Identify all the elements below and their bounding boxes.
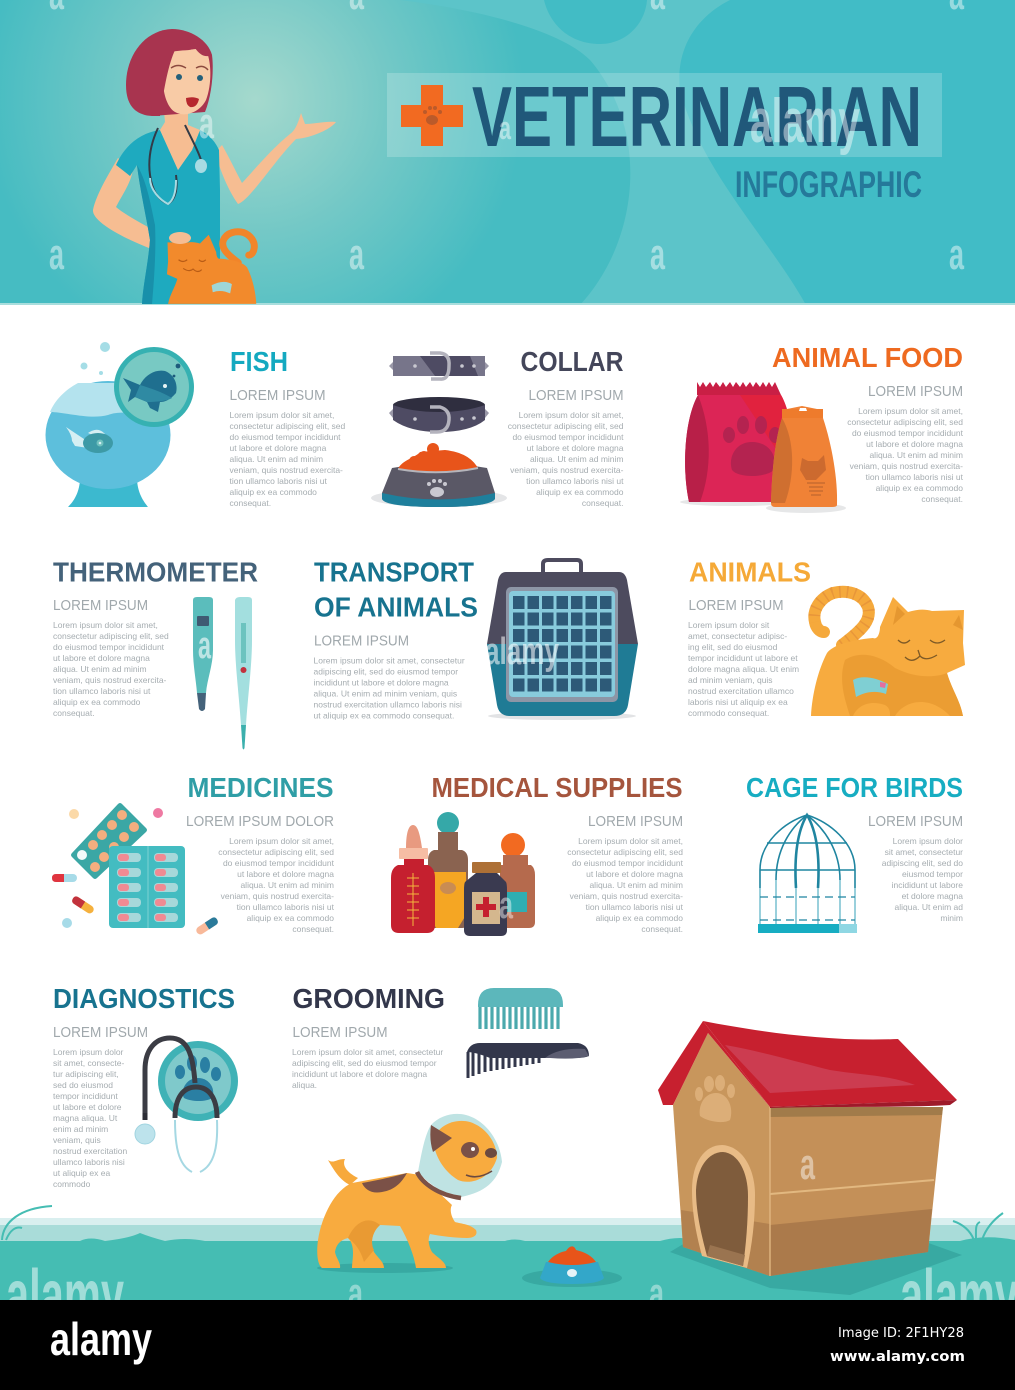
icon: thermometer with scale (235, 597, 252, 750)
body text: consectetur adipiscing elit, sed (847, 417, 963, 427)
watermark: alamy (485, 631, 559, 673)
brown bottle (437, 812, 459, 834)
body text: nostrud exercitation ullamco (688, 686, 794, 696)
body (317, 1173, 477, 1268)
neck (160, 100, 200, 170)
icon: right grass (953, 1213, 1003, 1240)
subheading: LOREM IPSUM (528, 387, 624, 404)
icon: stethoscope with paw (135, 1038, 238, 1172)
heading: diagnostics: DIAGNOSTICS (53, 983, 235, 1014)
icon: food bags (680, 382, 846, 513)
heading: thermometer: THERMOMETER (53, 556, 258, 588)
heading: animal food: ANIMAL FOOD (772, 342, 963, 373)
icon: pet carrier (485, 560, 638, 720)
body text: tion ullamco laboris nisi ut (53, 686, 151, 696)
watermark marks in header: alamy (750, 87, 860, 156)
body text: incididunt ut labore (892, 880, 963, 890)
section: grooming (292, 983, 589, 1090)
body text: dolore magna aliqua. Ut enim (688, 664, 799, 674)
body text: laboris nisi ut aliquip ex ea (688, 697, 788, 707)
illustration: veterinarian woman (93, 29, 336, 304)
icon: teal comb (478, 988, 563, 1029)
body text: consectetur adipiscing elit, sed (567, 847, 683, 857)
body text: veniam, quis nostrud exercita- (230, 465, 343, 475)
icon: flat collar (389, 353, 489, 379)
subheading: LOREM IPSUM DOLOR (186, 813, 334, 830)
bottom watermarks (6, 1256, 1015, 1336)
body text: aliqua. (292, 1080, 317, 1090)
face (163, 48, 210, 114)
body text: consectetur adipiscing elit, sed (218, 847, 334, 857)
body text: adipiscing elit, sed do eiusmod tempor (292, 1058, 437, 1068)
body text: Lorem ipsum dolor sit amet, (230, 410, 334, 420)
icon: small food bowl (522, 1246, 622, 1287)
heading: transport of animals: OF ANIMALS (314, 592, 478, 622)
icon: left grass (2, 1206, 52, 1240)
hair back (126, 29, 213, 116)
roof (658, 1021, 770, 1107)
body text: tur adipiscing elit, (53, 1069, 119, 1079)
body text: veniam, quis nostrud exercita- (510, 465, 624, 475)
watermark marks in header (49, 0, 964, 279)
body text: aliqua. Ut enim ad minim (240, 880, 334, 890)
illustration: dog house (658, 1021, 962, 1295)
body text: aliquip ex ea commodo (876, 483, 963, 493)
section: medical supplies (391, 772, 684, 936)
heading: medicines: MEDICINES (188, 772, 334, 803)
body text: aliqua. Ut enim ad minim (530, 454, 624, 464)
body text: ing elit, sed do eiusmod (688, 642, 778, 652)
subheading: LOREM IPSUM (53, 1024, 148, 1041)
section: medicines (52, 772, 335, 936)
body text: aliquip ex ea commodo (596, 913, 683, 923)
body text: enim ad minim (53, 1124, 108, 1134)
stethoscope (149, 125, 201, 204)
subheading: LOREM IPSUM (688, 597, 784, 614)
body text: tion ullamco laboris nisi ut (586, 902, 684, 912)
body text: Lorem ipsum dolor sit amet, (519, 410, 624, 420)
body text: Lorem ipsum dolor (53, 1047, 124, 1057)
body text: aliquip ex ea commodo (247, 913, 334, 923)
body text: ut labore et dolore magna (230, 443, 327, 453)
dark bottle (472, 862, 501, 873)
body text: ad minim veniam, quis (688, 675, 773, 685)
watermark marks in header: a (49, 230, 64, 279)
subheading: LOREM IPSUM (588, 813, 683, 830)
scrubs (116, 130, 220, 304)
body text: veniam, quis nostrud exercita- (850, 461, 963, 471)
icon: orange cat (811, 592, 965, 716)
image id: Image ID: 2F1HY28 (838, 1326, 964, 1341)
body text: consectetur adipiscing elit, sed (508, 421, 624, 431)
illustration: puppy with cone (317, 1114, 502, 1273)
subheading: LOREM IPSUM (868, 383, 963, 400)
heading: cage for birds: CAGE FOR BIRDS (746, 772, 963, 803)
section: animals (688, 556, 965, 718)
front wall (673, 1033, 770, 1276)
section: transport of animals (314, 556, 638, 720)
body text: veniam, quis nostrud exercita- (221, 891, 334, 901)
collar (417, 1172, 461, 1198)
body text: adipiscing elit, sed do eiusmod tempor (314, 666, 458, 676)
illustration: orange cat in header (167, 232, 256, 304)
body text: tion ullamco laboris nisi ut (866, 472, 964, 482)
heading: medical supplies: MEDICAL SUPPLIES (432, 772, 682, 803)
website: www.alamy.com (830, 1349, 965, 1365)
icon: digital thermometer (193, 597, 213, 711)
body text: Lorem ipsum dolor sit amet, consectetur (292, 1047, 443, 1057)
body text: tempor incididunt ut labore et (688, 653, 798, 663)
icon: digital thermometer: a (198, 625, 212, 667)
section: fish (46, 342, 346, 508)
body text: Lorem ipsum dolor sit amet, consectetur (314, 656, 465, 666)
body text: commodo (53, 1179, 91, 1189)
orange top bottle (501, 833, 525, 857)
body text: ut labore et dolore magna (527, 443, 624, 453)
head (433, 1121, 497, 1182)
subheading: LOREM IPSUM (230, 387, 326, 404)
body text: ut labore et dolore magna (237, 869, 334, 879)
section: collar (371, 346, 624, 508)
fringe (149, 32, 212, 116)
body text: ut labore et dolore (53, 1102, 122, 1112)
icon: dark comb (467, 1043, 589, 1078)
watermark: a (800, 1140, 815, 1189)
header banner (0, 0, 1015, 305)
body text: aliqua. Ut enim ad minim (53, 664, 147, 674)
body text: consequat. (641, 924, 683, 934)
body text: aliqua. Ut enim ad (894, 902, 963, 912)
body text: consectetur adipiscing elit, sed (53, 631, 169, 641)
section: cage for birds (746, 772, 963, 933)
body text: do eiusmod tempor incididunt (223, 858, 335, 868)
watermark: a (499, 885, 514, 927)
body text: consequat. (230, 498, 271, 508)
body text: ut aliquip ex ea (53, 1168, 110, 1178)
body text: do eiusmod tempor incididunt (512, 432, 624, 442)
body text: incididunt ut labore et dolore magna (314, 678, 449, 688)
body text: sed do eiusmod (53, 1080, 113, 1090)
ground strip (0, 1206, 1015, 1300)
watermark marks in header: a (349, 230, 364, 279)
watermark marks in header: a (650, 230, 665, 279)
subheading: LOREM IPSUM (53, 597, 148, 614)
heading: transport of animals: TRANSPORT (314, 556, 474, 588)
body text: tion ullamco laboris nisi ut (526, 476, 624, 486)
body text: do eiusmod tempor incididunt (230, 432, 341, 442)
subheading: LOREM IPSUM (292, 1024, 388, 1041)
icon: medicine bottles (391, 812, 535, 936)
body text: consequat. (921, 494, 963, 504)
body text: do eiusmod tempor incididunt (572, 858, 684, 868)
body text: Lorem ipsum dolor sit (688, 620, 770, 630)
heading: collar: COLLAR (520, 346, 624, 377)
bottom watermarks: alamy (6, 1256, 124, 1336)
raised arm (215, 113, 336, 204)
body text: ut aliquip ex ea commodo consequat. (314, 710, 454, 720)
body text: Lorem ipsum dolor (893, 836, 963, 846)
body text: tempor incididunt (53, 1091, 118, 1101)
body text: aliquip ex ea commodo (53, 697, 141, 707)
body text: consequat. (292, 924, 334, 934)
body text: ullamco laboris nisi (53, 1157, 125, 1167)
watermark marks in header: a (199, 99, 214, 148)
heading: grooming: GROOMING (292, 983, 445, 1014)
paw mark (695, 1075, 735, 1122)
back spot (362, 1173, 407, 1193)
body text: ut labore et dolore magna (866, 439, 963, 449)
heading: transport of animals (314, 556, 478, 622)
watermark marks in header: a (949, 230, 964, 279)
footer logo: alamy (50, 1313, 152, 1365)
body text: Lorem ipsum dolor sit amet, (53, 620, 158, 630)
body text: amet, consectetur adipisc- (688, 631, 787, 641)
body text: minim (940, 913, 963, 923)
body text: Lorem ipsum dolor sit amet, (229, 836, 334, 846)
back arm (93, 158, 172, 254)
body text: adipiscing elit, sed do (882, 858, 963, 868)
body text: aliqua. Ut enim ad minim (869, 450, 963, 460)
body text: tion ullamco laboris nisi ut (237, 902, 335, 912)
icon: fish bowl (46, 342, 194, 507)
heading: fish: FISH (230, 346, 288, 377)
body text: do eiusmod tempor incididunt (53, 642, 165, 652)
icon: orange cross with paw (401, 85, 463, 146)
body text: veniam, quis (53, 1135, 101, 1145)
tail (328, 1159, 358, 1185)
footer bar (0, 1300, 1015, 1390)
cone (418, 1114, 502, 1197)
icon: round collar (389, 397, 489, 432)
body text: aliquip ex ea commodo (230, 487, 317, 497)
subtitle: Infographic: INFOGRAPHIC (735, 164, 922, 205)
body text: consequat. (582, 498, 624, 508)
body text: veniam, quis nostrud exercita- (570, 891, 683, 901)
body text: consectetur adipiscing elit, sed (230, 421, 346, 431)
body text: eiusmod tempor (902, 869, 963, 879)
section: diagnostics (53, 983, 238, 1189)
body text: aliqua. Ut enim ad minim veniam, quis (314, 688, 457, 698)
body text: incididunt ut labore et dolore magna (292, 1069, 427, 1079)
body text: ut labore et dolore magna (586, 869, 683, 879)
side wall (770, 1107, 943, 1276)
bottom watermarks: a (649, 1269, 664, 1318)
icon: bird cage (758, 815, 857, 933)
body text: nostrud exercitation (53, 1146, 127, 1156)
subheading: LOREM IPSUM (314, 632, 409, 650)
body text: sit amet, consectetur (885, 847, 963, 857)
body text: aliqua. Ut enim ad minim (230, 454, 323, 464)
body text: tion ullamco laboris nisi ut (230, 476, 327, 486)
body text: magna aliqua. Ut (53, 1113, 118, 1123)
body text: ut labore et dolore magna (53, 653, 150, 663)
bottom watermarks: a (348, 1269, 363, 1318)
section: animal food (680, 342, 964, 513)
icon: food bowl (371, 443, 507, 507)
body text: commodo consequat. (688, 708, 769, 718)
icon: pills (52, 803, 219, 936)
body text: veniam, quis nostrud exercita- (53, 675, 167, 685)
body text: aliquip ex ea commodo (536, 487, 624, 497)
body text: Lorem ipsum dolor sit amet, (578, 836, 683, 846)
body text: Lorem ipsum dolor sit amet, (858, 406, 963, 416)
subheading: LOREM IPSUM (868, 813, 963, 830)
door (692, 1145, 755, 1268)
body text: do eiusmod tempor incididunt (852, 428, 964, 438)
body text: aliqua. Ut enim ad minim (589, 880, 683, 890)
body text: et dolore magna (902, 891, 963, 901)
body text: nostrud exercitation ullamco laboris nisi (314, 700, 462, 710)
watermark marks in header: a (499, 110, 511, 146)
hand on cat (169, 232, 191, 244)
section: thermometer (53, 556, 258, 750)
red bottle (406, 825, 422, 848)
fish in water (66, 427, 113, 453)
heading: animals: ANIMALS (689, 556, 811, 588)
body text: consequat. (53, 708, 95, 718)
body text: sit amet, consecte- (53, 1058, 125, 1068)
